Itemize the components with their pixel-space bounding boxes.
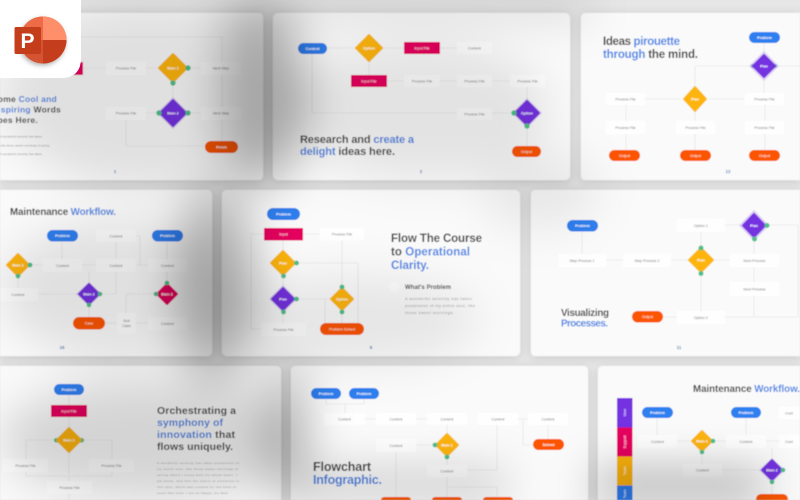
diamond: main 2 [156, 97, 191, 129]
content pill: Content [306, 47, 320, 51]
problem pill: Problem [276, 212, 292, 216]
diamond: main 1: Main 1 [696, 440, 708, 444]
pink input file row 2: Input File [361, 79, 377, 83]
problem pill b [349, 388, 379, 399]
solved pill [533, 439, 564, 450]
content g [427, 465, 467, 477]
output pill left [609, 150, 640, 161]
bullet text: Like these sweet mornings of spring [0, 144, 50, 148]
step process 1: Step Process 1 [569, 259, 595, 263]
output pill [512, 146, 541, 157]
content b [726, 435, 766, 448]
content c [683, 464, 722, 476]
problem solved pill: Problem Solved [329, 327, 355, 331]
process file top: Process File [332, 232, 352, 236]
heading: Maintenance Workflow. [693, 384, 800, 395]
diamond: plan purple [749, 51, 779, 81]
diamond: plan yellow: Plan [697, 258, 706, 262]
problem pill b: Problem [739, 411, 754, 415]
process box d: Process File [464, 112, 485, 116]
content f [376, 439, 416, 452]
diamond: option: Option [363, 46, 376, 50]
panel: slide 8 [222, 190, 520, 356]
heading: flows uniquely. [157, 441, 233, 453]
content top right: Cont [785, 411, 793, 415]
heading: Orchestrating a [157, 405, 236, 417]
diamond: plan yellow [684, 87, 706, 111]
content c [427, 413, 467, 425]
process box right top: Process File [754, 97, 775, 101]
diamond: main 1 [159, 54, 191, 86]
problem solved pill [320, 323, 364, 335]
content b: Content [390, 417, 402, 421]
case pill: Case [85, 322, 93, 326]
content d: Content [492, 417, 504, 421]
description text: A wonderful serenity has taken [405, 296, 472, 301]
output pill middle [680, 150, 711, 161]
page number: 8 [370, 345, 373, 350]
sub case box [117, 313, 136, 333]
diamond: plan yellow [689, 246, 713, 276]
content b: Content [110, 264, 122, 268]
diamond: option purple: Option [521, 112, 534, 116]
content d [478, 413, 518, 425]
output pill a [381, 497, 411, 500]
content a: Content [56, 264, 69, 268]
diamond: main 1: Main 1 [441, 444, 453, 448]
diamond: plan yellow: Plan [691, 98, 700, 102]
content c: Content [161, 264, 174, 268]
panel: slide 2 [273, 13, 570, 180]
panel: slide 12 [581, 13, 800, 180]
diamond: main 2: Main 2 [766, 468, 778, 472]
content top [96, 230, 136, 242]
pink input file row 2 [351, 75, 387, 87]
option 1 [677, 219, 725, 232]
content pill [298, 43, 327, 54]
page number: 1 [114, 169, 117, 174]
content e [148, 317, 187, 330]
description text: possession of my entire soul, like [405, 303, 475, 308]
next process b: Next Process [744, 287, 766, 291]
description text [157, 461, 239, 495]
description text: souls like mine. I am so happy, my dear [157, 491, 228, 495]
problem pill [567, 220, 598, 232]
content e: Content [542, 417, 554, 421]
diamond: main 1: Main 1 [63, 438, 75, 442]
process file top [320, 228, 364, 240]
content top: Content [110, 234, 122, 238]
heading: Maintenance Workflow. [10, 207, 116, 218]
diamond: plan yellow [271, 251, 299, 278]
icon: P tile: P [20, 30, 35, 53]
pink input file: Input File [414, 46, 430, 50]
subheading: What's Problem [405, 285, 451, 291]
description text: those sweet mornings. [405, 310, 454, 315]
problem pill: Problem [62, 388, 77, 392]
diamond: plan yellow: Plan [279, 262, 288, 266]
diamond: main 1 [692, 431, 715, 454]
pink input: Input [279, 232, 288, 236]
diamond: main 3: Main 3 [161, 292, 173, 296]
output pill c [483, 497, 513, 500]
diamond: option [356, 35, 382, 61]
diamond: plan purple: Plan [760, 64, 769, 68]
bullet circle [389, 282, 399, 292]
content c [148, 259, 187, 272]
pink input file [404, 42, 440, 54]
content e: Content [161, 322, 174, 326]
process box left: Process File [615, 126, 636, 130]
content right [779, 435, 800, 448]
heading: Flowchart [313, 460, 372, 474]
heading: Ideas pirouette [603, 36, 680, 48]
panel: slide 7 [0, 366, 281, 500]
problem pill [267, 208, 300, 220]
diamond: main 2 [759, 458, 785, 484]
heading: Infographic. [313, 473, 382, 487]
page number: 12 [725, 169, 731, 174]
swimlane bars: Team [623, 489, 627, 499]
case pill [756, 494, 788, 500]
pink input [264, 228, 303, 240]
process box c: Process File [517, 79, 538, 83]
diamond: main 3 [154, 281, 177, 304]
page number: 11 [677, 345, 682, 350]
output pill left: Output [619, 154, 630, 158]
next process b [730, 282, 779, 296]
content f: Content [390, 444, 402, 448]
content d: Content [12, 293, 24, 297]
bullet text: A wonderful serenity has taken [0, 152, 42, 156]
content g: Content [441, 469, 453, 473]
logo badge: PowerPoint [0, 0, 81, 78]
problem pill a [642, 407, 673, 418]
content top right [779, 407, 800, 419]
page number: 16 [59, 345, 65, 350]
heading: innovation that [157, 429, 235, 441]
process file bottom: Process File [59, 486, 80, 490]
pink input file [51, 405, 87, 417]
content d [0, 288, 38, 301]
process box row 2: Process File [116, 112, 136, 116]
content b [96, 259, 136, 272]
process file bottom [261, 323, 306, 336]
problem pill left: Problem [55, 234, 71, 238]
description text [405, 296, 475, 315]
content a: Content [338, 417, 351, 421]
description text: this spot, which was created for the bliss of [157, 485, 236, 489]
content c: Content [441, 417, 453, 421]
process box a: Process File [412, 79, 432, 83]
step process 2: Step Process 2 [634, 259, 660, 263]
diamond: main 1: Main 1 [12, 264, 24, 268]
diamond: plan purple: Plan [279, 298, 288, 302]
pink input file: Input File [61, 409, 77, 413]
swimlane bars: Team [623, 466, 627, 476]
diamond: plan purple: Plan [750, 224, 759, 228]
process box left top: Process File [615, 97, 636, 101]
problem pill a [311, 388, 341, 399]
problem pill [54, 384, 84, 395]
content a [43, 259, 82, 272]
content a: Content [651, 440, 664, 444]
bullet text: A wonderful serenity has taken [0, 134, 42, 138]
sub case box: Case [122, 324, 131, 328]
content b: Content [740, 440, 752, 444]
diamond: plan purple [739, 210, 770, 242]
heading: Visualizing [561, 308, 609, 319]
heading: Research and create a [300, 134, 414, 146]
next step box row 2: Next Step [213, 112, 229, 116]
problem pill: Problem [757, 36, 773, 40]
panel: slide 11 [531, 190, 800, 356]
problem pill b: Problem [357, 392, 372, 396]
output pill middle: Output [690, 154, 701, 158]
content right: Cont [785, 440, 793, 444]
process file right: Process File [101, 464, 122, 468]
diamond: main 2: Main 2 [167, 112, 179, 116]
diamond: main 1: Main 1 [167, 66, 179, 70]
description text: my entire soul, like these sweet mornings of [157, 467, 238, 471]
problem pill b [731, 407, 761, 418]
page number: 2 [420, 169, 423, 174]
diamond: main 2 [76, 282, 102, 307]
heading: spiring Words [1, 104, 61, 114]
heading: Processes. [561, 318, 608, 330]
panel: slide 16 [0, 190, 212, 356]
content box: Content [468, 46, 481, 50]
problem pill left [47, 230, 78, 242]
problem pill right: Problem [160, 234, 176, 238]
heading: Clarity. [391, 260, 429, 272]
finish pill: Finish [216, 145, 228, 149]
process box middle: Process File [685, 126, 706, 130]
process box right: Process File [754, 126, 775, 130]
diamond: plan purple [269, 285, 299, 314]
option 2: Option 2 [694, 316, 708, 320]
diamond: main 1 [54, 428, 84, 452]
finish pill [205, 141, 238, 153]
description text: A wonderful serenity has taken possession of [157, 461, 239, 465]
heading: symphony of [157, 417, 224, 429]
case pill [73, 317, 105, 330]
bullet text [0, 134, 50, 156]
process file left: Process File [15, 464, 36, 468]
diamond: option purple [511, 98, 542, 129]
diamond: option: Option [336, 298, 349, 302]
swimlane bars [617, 398, 632, 500]
heading: to Operational [391, 246, 470, 258]
step process 1 [558, 254, 606, 267]
problem pill a: Problem [319, 392, 334, 396]
content a [638, 435, 677, 448]
step process 2 [623, 254, 671, 267]
next process a [730, 254, 779, 267]
panel: slide infographic [291, 366, 588, 500]
diamond: main 1 [7, 254, 32, 278]
content e [528, 413, 568, 425]
output pill right: Output [759, 154, 770, 158]
problem pill: Problem [575, 224, 591, 228]
problem pill right [152, 230, 183, 242]
output pill: Output [521, 150, 532, 154]
diamond: option [331, 285, 353, 314]
pink input box [72, 62, 84, 76]
heading: delight ideas here. [300, 146, 395, 158]
icon: PowerPoint circle [20, 16, 66, 64]
panel: slide 1 [0, 13, 263, 180]
description text: am alone, and feel the charm of existence in [157, 479, 239, 483]
output pill b [432, 497, 462, 500]
process file right [89, 459, 134, 472]
process file bottom: Process File [273, 328, 294, 332]
process file bottom [47, 481, 92, 494]
problem pill a: Problem [650, 411, 666, 415]
option 1: Option 1 [694, 224, 708, 228]
next step box: Next Step [213, 66, 229, 70]
content a [324, 413, 365, 425]
heading: through the mind. [603, 49, 698, 61]
option 2 [677, 311, 725, 324]
swimlane bars: Support [623, 436, 627, 448]
diamond: main 1 [433, 434, 458, 459]
content c: Content [696, 468, 709, 472]
content b [376, 413, 416, 425]
process file left [3, 459, 48, 472]
swimlane bars: User [623, 408, 627, 416]
heading: Flow The Course [391, 233, 482, 245]
panel: slide swimlane [598, 366, 800, 500]
process box: Process File [116, 66, 136, 70]
next process a: Next Process [744, 259, 766, 263]
diamond: main 2: Main 2 [83, 292, 95, 296]
output pill [632, 311, 663, 322]
output pill right [749, 150, 780, 161]
solved pill: Solved [542, 443, 555, 447]
description text: spring which I enjoy with my whole heart. I [157, 473, 237, 477]
process box b: Process File [464, 79, 485, 83]
problem pill [749, 32, 780, 43]
output pill: Output [642, 315, 653, 319]
sub case box: Sub [123, 319, 130, 323]
